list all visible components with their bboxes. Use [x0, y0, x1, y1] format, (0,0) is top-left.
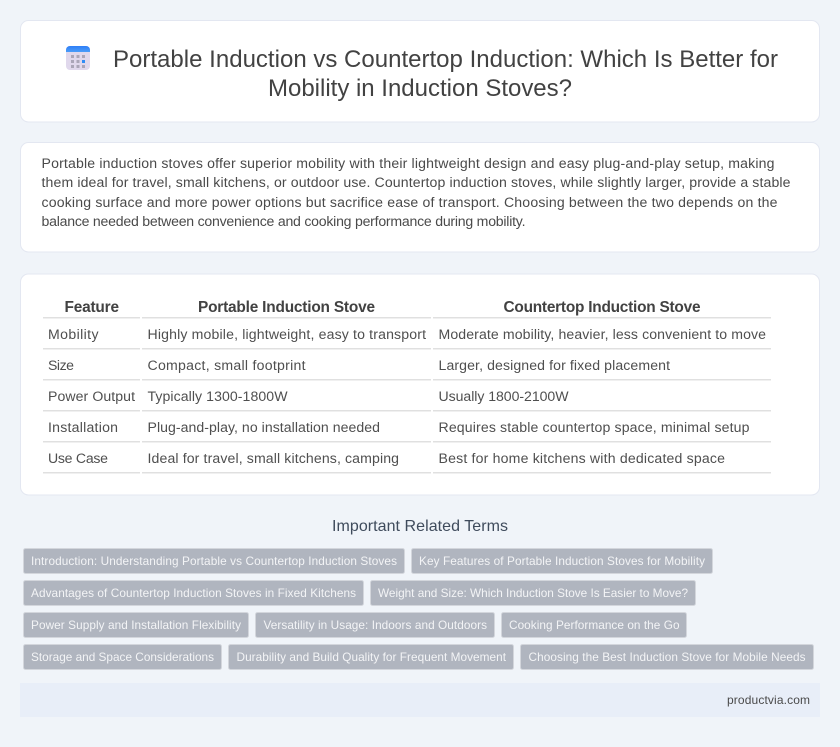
- row: size: Larger, designed for fixed placement: [438, 357, 670, 373]
- title: Mobility in Induction Stoves?: [268, 75, 572, 102]
- heading: important related terms: Important Related Terms: [332, 518, 508, 535]
- icon: calendar: [66, 46, 90, 70]
- related term chips: Key Features of Portable Induction Stoves for Mobility: [419, 554, 705, 568]
- row: installation: Requires stable countertop space, minimal setup: [438, 419, 750, 435]
- title: [113, 46, 778, 102]
- table header: Feature: [64, 299, 119, 316]
- row: use case: Use Case: [48, 450, 108, 466]
- related term chips: Storage and Space Considerations: [31, 650, 214, 664]
- row: mobility: Mobility: [48, 326, 99, 342]
- row: power output: Usually 1800-2100W: [438, 388, 569, 404]
- related term chips: Versatility in Usage: Indoors and Outdoors: [264, 618, 487, 632]
- row: use case: Best for home kitchens with dedicated space: [438, 450, 725, 466]
- row: mobility: Highly mobile, lightweight, easy to transport: [148, 326, 426, 342]
- table header: Portable Induction Stove: [198, 299, 375, 316]
- row: power output: Power Output: [48, 388, 135, 404]
- table header: [64, 299, 701, 316]
- text block: introduction: Portable induction stoves offer superior mobility with their lightweight design and easy plug-and-play setup, making: [42, 155, 774, 171]
- title: Portable Induction vs Countertop Induction: Which Is Better for: [113, 46, 778, 73]
- text block: introduction: them ideal for travel, small kitchens, or outdoor use. Countertop induction stoves, while slightly larger, provide a stable: [42, 174, 791, 190]
- related term chips: Weight and Size: Which Induction Stove Is Easier to Move?: [378, 586, 688, 600]
- table header: Countertop Induction Stove: [504, 299, 701, 316]
- row: installation: Plug-and-play, no installation needed: [148, 419, 380, 435]
- row: use case: [48, 450, 725, 466]
- text block: introduction: [42, 155, 791, 229]
- related term chips: Cooking Performance on the Go: [509, 618, 680, 632]
- row: installation: [48, 419, 750, 435]
- text block: introduction: balance needed between convenience and cooking performance during mobility.: [42, 213, 526, 229]
- row: power output: Typically 1300-1800W: [148, 388, 288, 404]
- footer: productvia.com: [727, 693, 810, 707]
- related term chips: Introduction: Understanding Portable vs Countertop Induction Stoves: [31, 554, 397, 568]
- related term chips: Choosing the Best Induction Stove for Mobile Needs: [528, 650, 806, 664]
- row: size: Size: [48, 357, 74, 373]
- row: size: Compact, small footprint: [148, 357, 306, 373]
- row: mobility: [48, 326, 766, 342]
- text block: introduction: cooking surface and more power options but sacrifice ease of transport. Choosing between the two depends on the: [42, 194, 778, 210]
- panel: introduction: [20, 142, 820, 252]
- footer: [20, 683, 820, 717]
- row: power output: [48, 388, 569, 404]
- related term chips: Advantages of Countertop Induction Stoves in Fixed Kitchens: [31, 586, 356, 600]
- related term chips: Durability and Build Quality for Frequent Movement: [236, 650, 507, 664]
- row: mobility: Moderate mobility, heavier, less convenient to move: [438, 326, 766, 342]
- row: size: [48, 357, 670, 373]
- related term chips: [24, 548, 814, 670]
- row: installation: Installation: [48, 419, 118, 435]
- related term chips: Power Supply and Installation Flexibility: [31, 618, 241, 632]
- panel: comparison table: [20, 274, 820, 495]
- row: use case: Ideal for travel, small kitchens, camping: [148, 450, 399, 466]
- panel: title header: [20, 20, 820, 122]
